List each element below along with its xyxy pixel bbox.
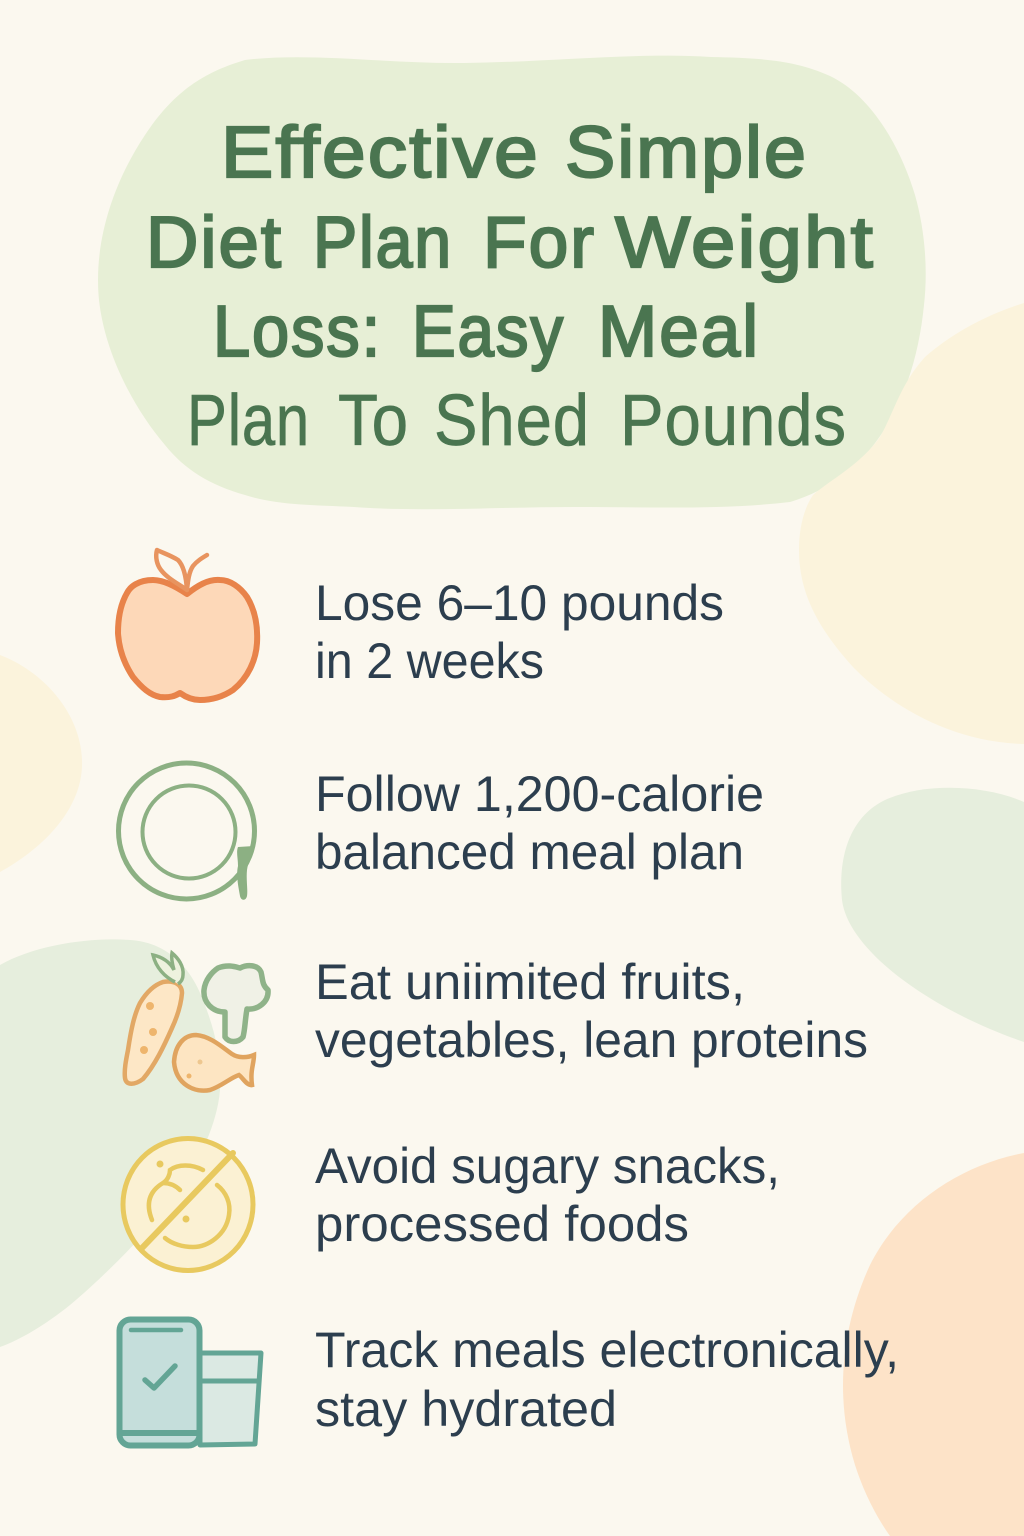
tracking text	[315, 1322, 899, 1437]
title text: Loss:	[213, 292, 382, 372]
cream blob overlapping title panel	[799, 303, 1024, 744]
benefit text: Lose 6–10 pounds	[315, 575, 724, 631]
title text	[146, 113, 875, 461]
title text: Pounds	[620, 381, 847, 461]
title text: For	[483, 203, 596, 283]
icon: apple	[118, 550, 257, 700]
icon: no sugary snacks	[123, 1138, 253, 1270]
benefit text: in 2 weeks	[315, 633, 544, 689]
title text: Diet	[146, 203, 283, 283]
avoid text	[315, 1138, 780, 1252]
title text: To	[338, 381, 409, 461]
carrot leaves	[153, 953, 183, 984]
foods text: vegetables, lean proteins	[315, 1012, 868, 1068]
tracking text: stay hydrated	[315, 1381, 617, 1437]
row 2: calorie plan	[118, 763, 764, 900]
carrot	[125, 982, 182, 1084]
title text: Shed	[434, 381, 590, 461]
title panel	[98, 56, 926, 509]
broccoli	[204, 966, 268, 1042]
meal plan text: balanced meal plan	[315, 824, 744, 880]
title text: Plan	[313, 203, 453, 283]
title text: Meal	[598, 292, 760, 372]
title text: Plan	[187, 381, 310, 461]
title text: Effective	[221, 113, 540, 193]
avoid text: processed foods	[315, 1196, 689, 1252]
row 3: foods	[125, 953, 868, 1091]
title text: Simple	[565, 113, 808, 193]
row 1: lose weight	[118, 550, 724, 700]
tracking text: Track meals electronically,	[315, 1322, 899, 1378]
meal plan text: Follow 1,200-calorie	[315, 766, 764, 822]
title text: Weight	[615, 203, 875, 283]
meal plan text	[315, 766, 764, 880]
icon: carrot, broccoli, chicken	[125, 953, 268, 1091]
chicken	[174, 1035, 254, 1091]
icon: phone and glass	[120, 1320, 261, 1446]
foods text	[315, 954, 868, 1068]
benefit text	[315, 575, 724, 689]
row 5: track	[120, 1320, 899, 1446]
icon: plate	[118, 763, 254, 900]
row 4: avoid	[123, 1138, 780, 1270]
title text: Easy	[412, 292, 565, 372]
foods text: Eat uniimited fruits,	[315, 954, 745, 1010]
avoid text: Avoid sugary snacks,	[315, 1138, 780, 1194]
